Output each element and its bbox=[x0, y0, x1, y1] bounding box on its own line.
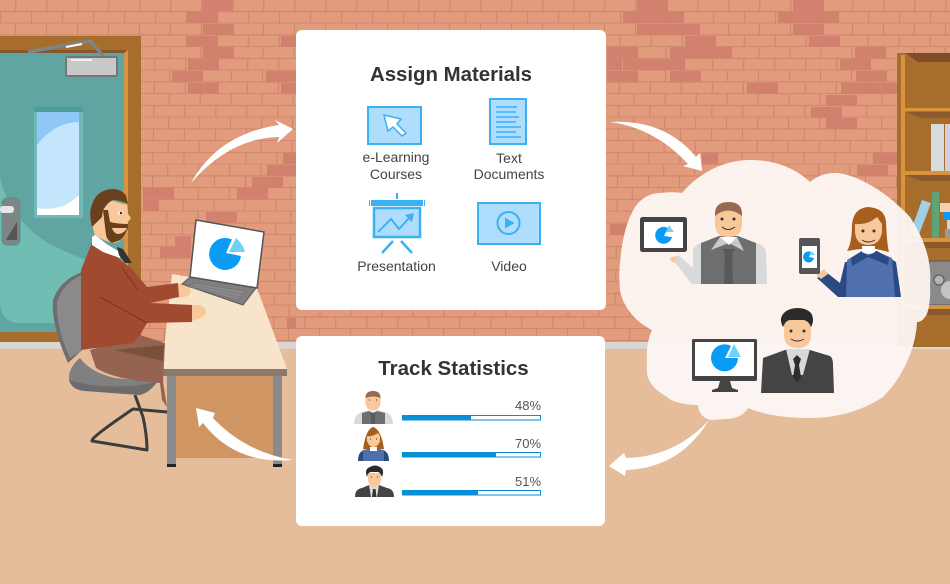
panel: track statistics bbox=[296, 336, 605, 526]
phone bbox=[799, 238, 820, 274]
trousers bbox=[90, 335, 167, 407]
eye bbox=[118, 211, 123, 215]
thought cloud with learners bbox=[619, 160, 930, 420]
learner: woman with phone bbox=[799, 207, 901, 297]
icon: e-learning courses bbox=[368, 107, 421, 144]
bookshelf bbox=[897, 53, 950, 347]
heading: assign materials: Assign Materials bbox=[370, 64, 532, 86]
shelf books bbox=[910, 124, 950, 238]
row: learner three, 51 percent bbox=[355, 466, 541, 497]
label: text documents: Text bbox=[496, 150, 522, 166]
progress bar: 48 percent bbox=[402, 415, 540, 420]
floor bbox=[0, 349, 950, 584]
value: 51 percent: 51% bbox=[515, 474, 541, 489]
brick wall bbox=[0, 0, 950, 342]
hands bbox=[177, 284, 191, 298]
learner: man at monitor bbox=[692, 308, 834, 393]
icon: video bbox=[478, 203, 540, 244]
icon: presentation bbox=[369, 193, 425, 253]
value: 70 percent: 70% bbox=[515, 436, 541, 451]
heading: track statistics: Track Statistics bbox=[378, 357, 529, 380]
door handle bbox=[0, 198, 20, 245]
panel: assign materials bbox=[296, 30, 606, 310]
arrow: materials to learners bbox=[610, 122, 702, 171]
avatar: woman bbox=[358, 427, 389, 461]
tablet bbox=[640, 217, 687, 252]
collar and tie bbox=[92, 235, 120, 258]
desktop monitor bbox=[692, 339, 757, 392]
door closer bbox=[28, 41, 117, 76]
value: 48 percent: 48% bbox=[515, 398, 541, 413]
laptop bbox=[182, 220, 264, 305]
label: e-learning courses: e-Learning bbox=[363, 149, 429, 165]
man at desk bbox=[81, 189, 206, 407]
progress bar: 51 percent bbox=[402, 490, 540, 496]
row: learner two, 70 percent bbox=[358, 427, 541, 461]
avatar: man in vest bbox=[354, 391, 393, 424]
door bbox=[0, 36, 141, 342]
door window bbox=[34, 107, 83, 218]
hair bbox=[90, 189, 128, 227]
icon: text documents bbox=[490, 99, 526, 144]
progress bar: 70 percent bbox=[402, 452, 540, 458]
label: presentation: Presentation bbox=[357, 258, 436, 274]
label: e-learning courses: Courses bbox=[370, 166, 422, 182]
avatar: man in suit bbox=[355, 466, 394, 497]
desk bbox=[162, 274, 287, 467]
label: text documents: Documents bbox=[474, 166, 544, 182]
learner: man with tablet bbox=[640, 202, 767, 284]
arrow: statistics to man bbox=[196, 408, 293, 461]
beard bbox=[103, 210, 128, 243]
laptop pie chart bbox=[209, 238, 245, 270]
arrow: learners to statistics bbox=[609, 420, 709, 476]
shelf speaker box bbox=[929, 261, 950, 305]
arrow: man to materials bbox=[191, 120, 293, 183]
row: learner one, 48 percent bbox=[354, 391, 541, 424]
office chair bbox=[53, 272, 167, 450]
head bbox=[92, 200, 131, 243]
label: video: Video bbox=[491, 258, 527, 274]
jacket bbox=[81, 240, 192, 350]
